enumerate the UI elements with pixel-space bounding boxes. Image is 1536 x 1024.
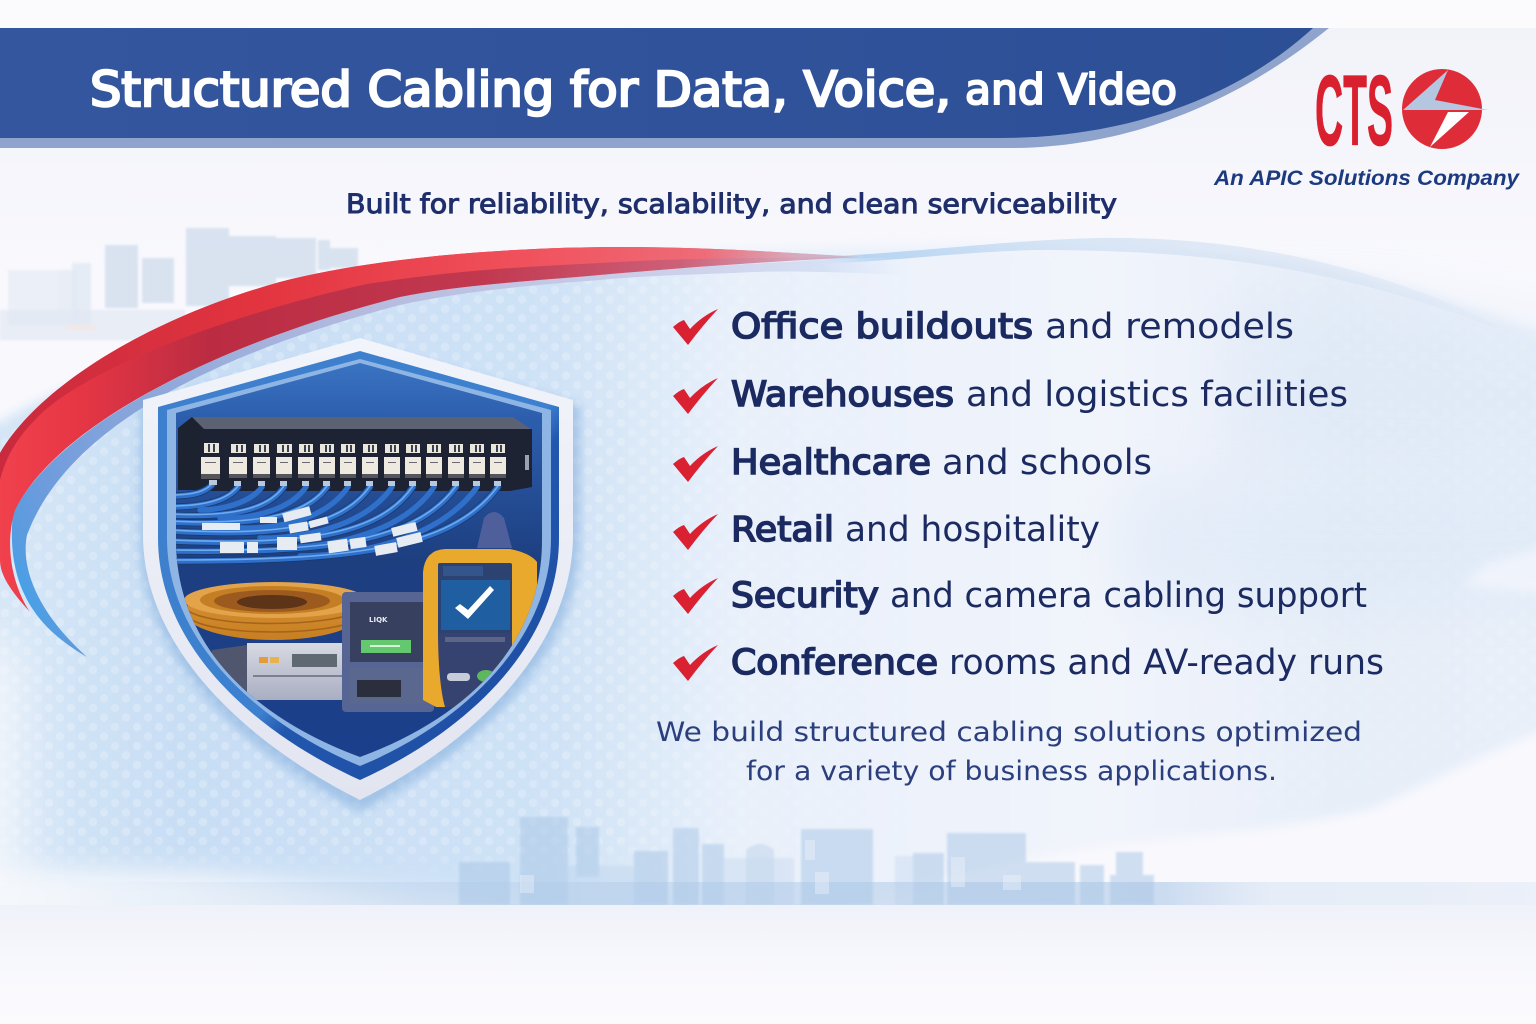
title: and Video xyxy=(965,65,1177,114)
item: healthcare xyxy=(673,443,1152,483)
orange cable coil xyxy=(184,582,366,640)
item: healthcare: Healthcare xyxy=(731,443,931,483)
item: office buildouts xyxy=(673,307,1294,347)
floor xyxy=(0,905,1536,1024)
item: warehouses: and logistics facilities xyxy=(966,375,1348,415)
skyline: bottom xyxy=(60,817,1536,905)
patch panel xyxy=(178,417,532,491)
item: office buildouts: Office buildouts xyxy=(731,307,1033,347)
item: conference: rooms and AV-ready runs xyxy=(949,643,1384,683)
background wash xyxy=(0,248,1536,905)
closing statement: for a variety of business applications. xyxy=(746,756,1277,787)
grey tester unit xyxy=(342,592,434,712)
item: retail: and hospitality xyxy=(845,510,1100,550)
handheld certifier with check xyxy=(423,549,537,707)
title: Structured Cabling for Data, Voice, xyxy=(90,62,951,118)
item: conference: Conference xyxy=(731,643,938,683)
ports xyxy=(201,443,506,479)
cable labels xyxy=(202,506,423,556)
closing statement xyxy=(656,717,1362,787)
tagline: An APIC Solutions Company xyxy=(1213,167,1520,190)
item: retail: Retail xyxy=(731,510,834,550)
blue network cables xyxy=(170,480,501,561)
logo: CTS: CTS xyxy=(1315,55,1393,167)
checklist xyxy=(673,307,1384,683)
item: warehouses: Warehouses xyxy=(731,375,954,415)
item: security: Security xyxy=(731,576,879,616)
item: security: and camera cabling support xyxy=(890,576,1367,616)
swoosh: fading blue right arc xyxy=(790,238,1536,345)
icon: logo circle with bolts xyxy=(1402,69,1488,149)
header banner xyxy=(0,28,1329,148)
item: warehouses xyxy=(673,375,1348,415)
shield with cabling equipment xyxy=(140,338,580,812)
item: conference xyxy=(673,643,1384,683)
subtitle: Built for reliability, scalability, and clean serviceability xyxy=(346,189,1117,220)
skyline: upper left xyxy=(0,228,358,340)
antenna cone xyxy=(477,512,512,548)
silver network device xyxy=(212,643,347,700)
swoosh: red and blue arc xyxy=(0,247,900,657)
grey tester unit: LIQK xyxy=(369,616,388,624)
closing statement: We build structured cabling solutions optimized xyxy=(656,717,1362,748)
item: office buildouts: and remodels xyxy=(1045,307,1294,347)
item: security xyxy=(673,576,1367,616)
item: retail xyxy=(673,510,1100,550)
item: healthcare: and schools xyxy=(942,443,1152,483)
